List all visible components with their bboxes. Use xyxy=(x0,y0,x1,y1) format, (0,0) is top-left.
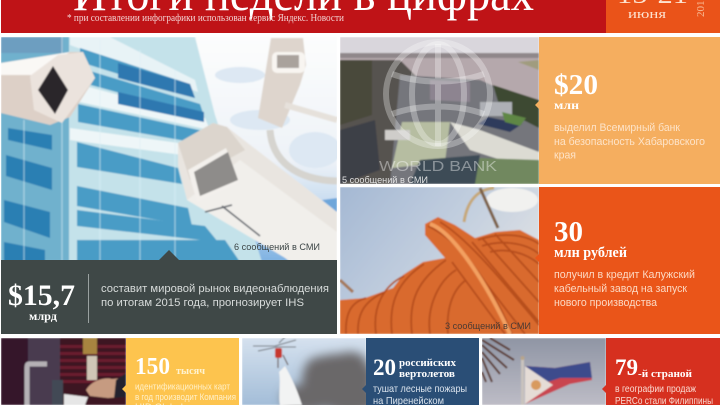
panel: $20 million stat: млн xyxy=(554,98,579,112)
panel: 20 helicopters stat: российских xyxy=(399,357,456,369)
panel: World Bank photo xyxy=(340,37,539,186)
World Bank logo xyxy=(379,42,497,175)
panel: door access photo xyxy=(1,338,126,405)
door handle xyxy=(27,364,47,405)
panel: Philippines flag photo xyxy=(482,338,606,405)
description: в географии продаж xyxy=(615,383,696,395)
description: получил в кредит Калужский xyxy=(554,269,695,281)
panel: $15.7 billion stat xyxy=(1,250,337,334)
panel: $15.7 billion stat: млрд xyxy=(29,309,57,323)
header banner xyxy=(1,0,606,33)
panel: 79th country stat xyxy=(602,338,720,405)
hand with card xyxy=(86,378,122,398)
World Bank logo: WORLD BANK xyxy=(379,158,497,175)
panel: $20 million stat: на безопасность Хабаровского xyxy=(554,136,705,148)
subtitle note: * при составлении инфографики использован сервис Яндекс. Новости xyxy=(67,13,345,24)
flagpole xyxy=(521,358,524,405)
description: идентификационных карт xyxy=(135,382,231,392)
smoke xyxy=(282,352,380,405)
panel: $20 million stat: края xyxy=(554,150,576,162)
panel: 150 thousand stat: тысяч xyxy=(176,366,205,377)
panel: helicopter photo xyxy=(242,338,366,405)
description: составит мировой рынок видеонаблюдения xyxy=(101,283,329,295)
panel: 30 million stat: кабельный завод на запуск xyxy=(554,283,687,295)
panel: 20 helicopters stat xyxy=(362,338,479,405)
date block: июня xyxy=(628,6,666,21)
flag xyxy=(526,377,592,404)
panel: 79th country stat: -й страной xyxy=(638,368,693,380)
value: 150 xyxy=(135,354,170,380)
panel: video surveillance photo xyxy=(1,37,341,262)
panel: 30 million stat: млн рублей xyxy=(554,245,627,261)
helicopter xyxy=(253,336,296,368)
palm fronds xyxy=(482,338,514,382)
description: выделил Всемирный банк xyxy=(554,122,680,134)
panel: 150 thousand stat xyxy=(122,338,239,405)
panel: 30 million stat: нового производства xyxy=(554,297,658,309)
media mentions: 3 сообщений в СМИ xyxy=(445,321,531,332)
cable coil xyxy=(464,188,494,222)
media mentions: 6 сообщений в СМИ xyxy=(234,242,320,253)
description: тушат лесные пожары xyxy=(373,383,467,395)
value: 79 xyxy=(615,355,638,380)
camera: main xyxy=(178,123,337,262)
camera: left xyxy=(1,52,95,125)
panel: 30 million stat xyxy=(535,187,720,334)
date block xyxy=(606,0,720,33)
value: $20 xyxy=(554,69,598,101)
panel: 150 thousand stat: в год производит Компания xyxy=(135,392,236,403)
panel: 20 helicopters stat: вертолетов xyxy=(399,368,455,380)
media mentions: 5 сообщений в СМИ xyxy=(342,175,428,186)
value: 30 xyxy=(554,216,583,248)
panel: cable photo xyxy=(340,187,539,334)
camera: top right xyxy=(258,38,306,128)
value: 20 xyxy=(373,355,396,380)
value: $15,7 xyxy=(8,279,75,312)
panel: $15.7 billion stat: по итогам 2015 года, прогнозирует IHS xyxy=(101,297,304,309)
building xyxy=(68,37,262,260)
panel: $20 million stat xyxy=(535,37,720,184)
